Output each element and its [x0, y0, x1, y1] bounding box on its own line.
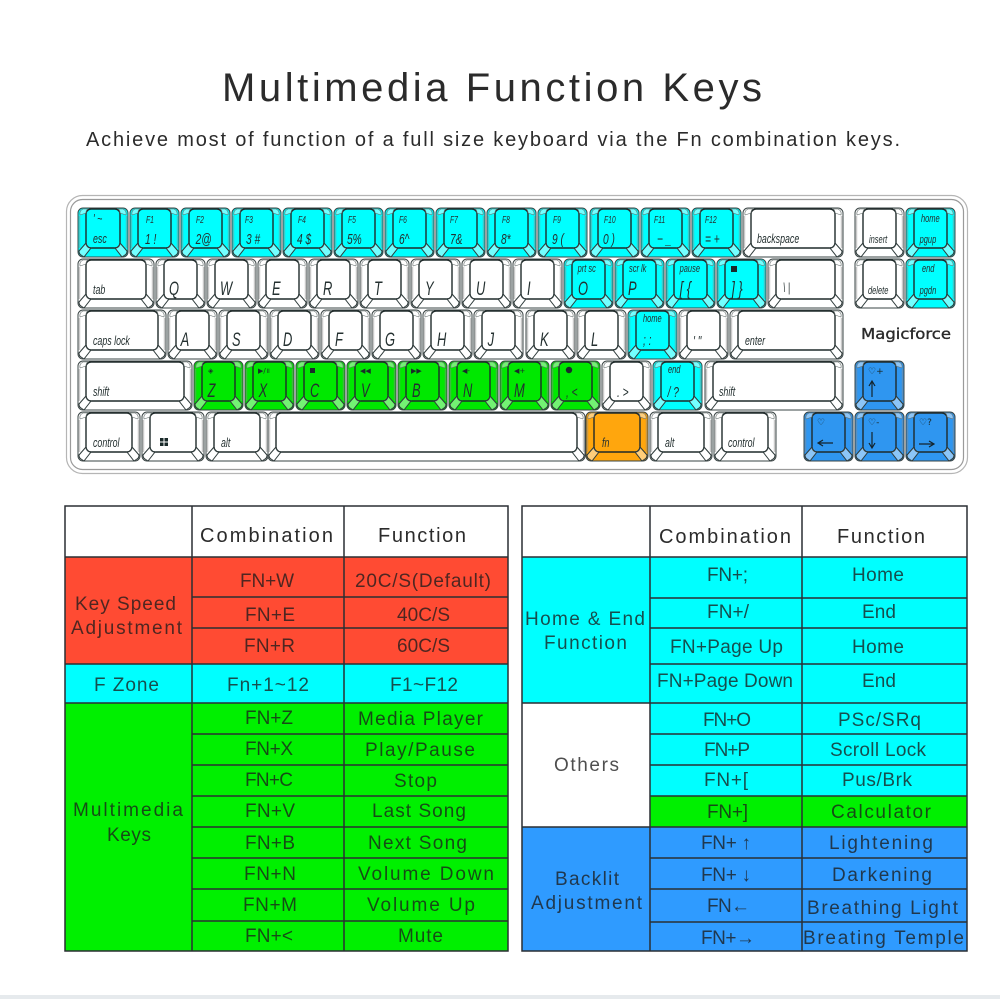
shift key row: ◀+ [514, 367, 525, 375]
others rows: Others [554, 755, 619, 776]
shift key row: . > [617, 383, 629, 401]
function key row: F10 [604, 214, 616, 225]
backlit adjustment rows: FN+→ [701, 928, 755, 949]
left table fills [65, 506, 508, 951]
backlit adjustment rows: FN+ ↓ [701, 865, 751, 886]
bottom key row [78, 412, 955, 461]
function key row: 2@ [195, 230, 212, 248]
others rows: Calculator [831, 802, 932, 823]
function key row: 6^ [399, 230, 410, 248]
backlit adjustment rows [531, 833, 964, 949]
multimedia keys rows: Next Song [368, 833, 467, 854]
function key row: − _ [657, 230, 671, 248]
others rows: FN+O [703, 710, 751, 731]
home key row: L [591, 330, 598, 351]
home key row: home [643, 311, 662, 324]
QWERTY key row: scr lk [629, 261, 647, 274]
shift key row [78, 361, 904, 410]
function key row: F12 [705, 214, 717, 225]
shift key row: N [463, 381, 473, 402]
QWERTY key row: tab [93, 283, 105, 298]
bottom key row: control [93, 436, 120, 451]
multimedia keys rows: FN+Z [245, 708, 293, 729]
backlit adjustment rows: Darkening [832, 865, 932, 886]
others rows: FN+] [707, 802, 748, 823]
home and end function rows: End [862, 602, 896, 623]
F zone row [94, 675, 458, 696]
home and end function rows: Function [544, 633, 627, 654]
home key row: J [487, 330, 495, 351]
key speed adjustment rows [71, 571, 491, 657]
home key row: ; : [643, 331, 652, 349]
left table grid [65, 506, 508, 951]
QWERTY key row: ] } [730, 279, 743, 300]
shift key row: shift [93, 385, 110, 400]
QWERTY key row: Q [169, 279, 179, 300]
bottom key row: alt [665, 436, 675, 451]
QWERTY key row: O [578, 279, 588, 300]
others rows [554, 710, 932, 823]
backlit adjustment rows: FN+ ↑ [701, 833, 751, 854]
home key row: G [385, 330, 395, 351]
shift key row: V [361, 381, 371, 402]
home key row: F [335, 330, 344, 351]
QWERTY key row: \ | [783, 281, 790, 296]
left table header: Combination [200, 525, 333, 547]
QWERTY key row: prt sc [577, 261, 596, 274]
key speed adjustment rows: FN+W [240, 571, 294, 592]
function key row: F3 [245, 214, 253, 225]
right table grid [522, 506, 967, 951]
QWERTY key row: T [374, 279, 383, 300]
shift key row: Z [207, 381, 216, 402]
multimedia keys rows [73, 708, 494, 947]
multimedia keys rows: Volume Down [358, 864, 494, 885]
bottom key row: ♡ [817, 418, 825, 428]
function key row: F11 [654, 214, 665, 225]
subtitle: Achieve most of function of a full size keyboard via the Fn combination keys. [86, 129, 900, 151]
QWERTY key row: U [476, 279, 486, 300]
home key row: A [180, 330, 189, 351]
function key row: F5 [348, 214, 356, 225]
bottom key row: control [728, 436, 755, 451]
right table fills [522, 506, 967, 951]
QWERTY key row: pgdn [919, 283, 936, 296]
others rows: Pus/Brk [842, 770, 912, 791]
shift key row: C [310, 381, 320, 402]
keyboard diagram [66, 196, 968, 474]
function key row: F4 [298, 214, 306, 225]
multimedia keys rows: Keys [107, 825, 151, 846]
QWERTY key row: R [323, 279, 333, 300]
function key row: F6 [399, 214, 407, 225]
key speed adjustment rows: 60C/S [397, 636, 450, 657]
others rows: Scroll Lock [830, 740, 926, 761]
right table header: Combination [659, 526, 791, 548]
key speed adjustment rows: FN+E [245, 605, 295, 626]
shift key row: shift [719, 385, 736, 400]
function key row: esc [93, 232, 107, 247]
function key row: 4 $ [297, 230, 312, 248]
QWERTY key row: W [220, 279, 234, 300]
left table header: Function [378, 525, 466, 547]
others rows: FN+[ [704, 770, 749, 791]
home and end function rows: End [862, 671, 896, 692]
function key row: ' ~ [93, 212, 103, 227]
shift key row: M [514, 381, 525, 402]
QWERTY key row [78, 259, 955, 308]
home and end function rows: FN+Page Down [657, 671, 793, 692]
home key row: H [437, 330, 447, 351]
multimedia keys rows: FN+C [245, 770, 293, 791]
brand logo: Magicforce: Magicforce [861, 325, 951, 343]
left table header [200, 525, 466, 547]
multimedia keys rows: FN+X [245, 739, 293, 760]
F zone row: Fn+1~12 [227, 675, 309, 696]
home key row [78, 310, 843, 359]
function key row: F2 [196, 214, 204, 225]
function key row: 7& [450, 230, 462, 248]
shift key row: ◀- [462, 367, 470, 375]
shift key row: ◈ [208, 367, 214, 375]
home key row: K [540, 330, 550, 351]
function key row: 8* [501, 230, 511, 248]
key speed adjustment rows: 40C/S [397, 605, 450, 626]
shift key row: ◀◀ [360, 367, 371, 375]
function key row: 3 # [246, 230, 261, 248]
backlit adjustment rows: Lightening [829, 833, 933, 854]
key speed adjustment rows: FN+R [244, 636, 295, 657]
key speed adjustment rows: Adjustment [71, 618, 183, 639]
left table [65, 506, 508, 951]
function key row: F1 [146, 214, 154, 225]
multimedia keys rows: FN+B [245, 833, 295, 854]
QWERTY key row: P [628, 279, 637, 300]
F zone row: F Zone [94, 675, 159, 696]
home and end function rows: FN+Page Up [670, 637, 783, 658]
function key row: 5% [347, 230, 362, 248]
function key row: home [921, 211, 940, 224]
function key row: pgup [919, 232, 936, 245]
backlit adjustment rows: Backlit [555, 869, 620, 890]
shift key row: , < [566, 383, 578, 401]
others rows: PSc/SRq [838, 710, 921, 731]
home and end function rows: Home [852, 565, 904, 586]
multimedia keys rows: FN+N [244, 864, 296, 885]
function key row: backspace [757, 232, 799, 247]
home key row: enter [745, 334, 766, 349]
shift key row: ▶▶ [411, 367, 422, 375]
key speed adjustment rows: Key Speed [75, 594, 176, 615]
right table header: Function [837, 526, 925, 548]
multimedia keys rows: Volume Up [367, 895, 475, 916]
title: Multimedia Function Keys [222, 66, 762, 110]
QWERTY key row: [ { [679, 279, 692, 300]
backlit adjustment rows: Breathing Light [807, 898, 959, 919]
bottom key row: fn [602, 436, 609, 451]
right table header [659, 526, 925, 548]
home key row: S [232, 330, 241, 351]
others rows: FN+P [704, 740, 750, 761]
F zone row: F1~F12 [390, 675, 458, 696]
shift key row: ▶/॥ [258, 367, 270, 375]
QWERTY key row: Y [425, 279, 435, 300]
multimedia keys rows: Play/Pause [365, 740, 475, 761]
shift key row: end [668, 362, 681, 375]
home and end function rows: FN+/ [707, 602, 750, 623]
bottom key row: ♡? [919, 418, 932, 428]
function key row: = + [705, 230, 720, 248]
home and end function rows: FN+; [707, 565, 748, 586]
function key row: F8 [502, 214, 510, 225]
multimedia keys rows: Mute [398, 926, 443, 947]
function key row: insert [869, 232, 888, 245]
backlit adjustment rows: FN← [707, 896, 750, 917]
shift key row: / ? [667, 383, 680, 401]
right table [522, 506, 967, 951]
home and end function rows [525, 565, 904, 692]
QWERTY key row: I [527, 279, 531, 300]
bottom key row: alt [221, 436, 231, 451]
home key row: ' " [693, 332, 703, 350]
bottom key row: ♡- [868, 418, 879, 428]
QWERTY key row: E [272, 279, 281, 300]
home and end function rows: Home [852, 637, 904, 658]
shift key row: X [258, 381, 268, 402]
home key row: D [283, 330, 293, 351]
multimedia keys rows: Media Player [358, 709, 484, 730]
function key row: F7 [450, 214, 459, 225]
multimedia keys rows: Multimedia [73, 800, 183, 821]
multimedia keys rows: FN+< [245, 926, 293, 947]
QWERTY key row: end [922, 261, 935, 274]
function key row: F9 [553, 214, 561, 225]
bottom band [0, 995, 1000, 999]
multimedia keys rows: FN+M [243, 895, 297, 916]
shift key row: ♡+ [868, 367, 884, 377]
keyboard case [66, 196, 968, 474]
function key row: 9 ( [552, 230, 565, 248]
shift key row: B [412, 381, 421, 402]
QWERTY key row: pause [679, 261, 700, 274]
QWERTY key row: delete [868, 283, 888, 296]
multimedia keys rows: Last Song [372, 801, 466, 822]
home and end function rows: Home & End [525, 609, 645, 630]
function key row [78, 208, 955, 257]
function key row: 0 ) [603, 230, 615, 248]
home key row: caps lock [93, 334, 131, 349]
multimedia keys rows: FN+V [245, 801, 295, 822]
backlit adjustment rows: Adjustment [531, 893, 643, 914]
key speed adjustment rows: 20C/S(Default) [355, 571, 491, 592]
backlit adjustment rows: Breating Temple [803, 928, 964, 949]
multimedia keys rows: Stop [394, 771, 437, 792]
function key row: 1 ! [145, 230, 157, 248]
